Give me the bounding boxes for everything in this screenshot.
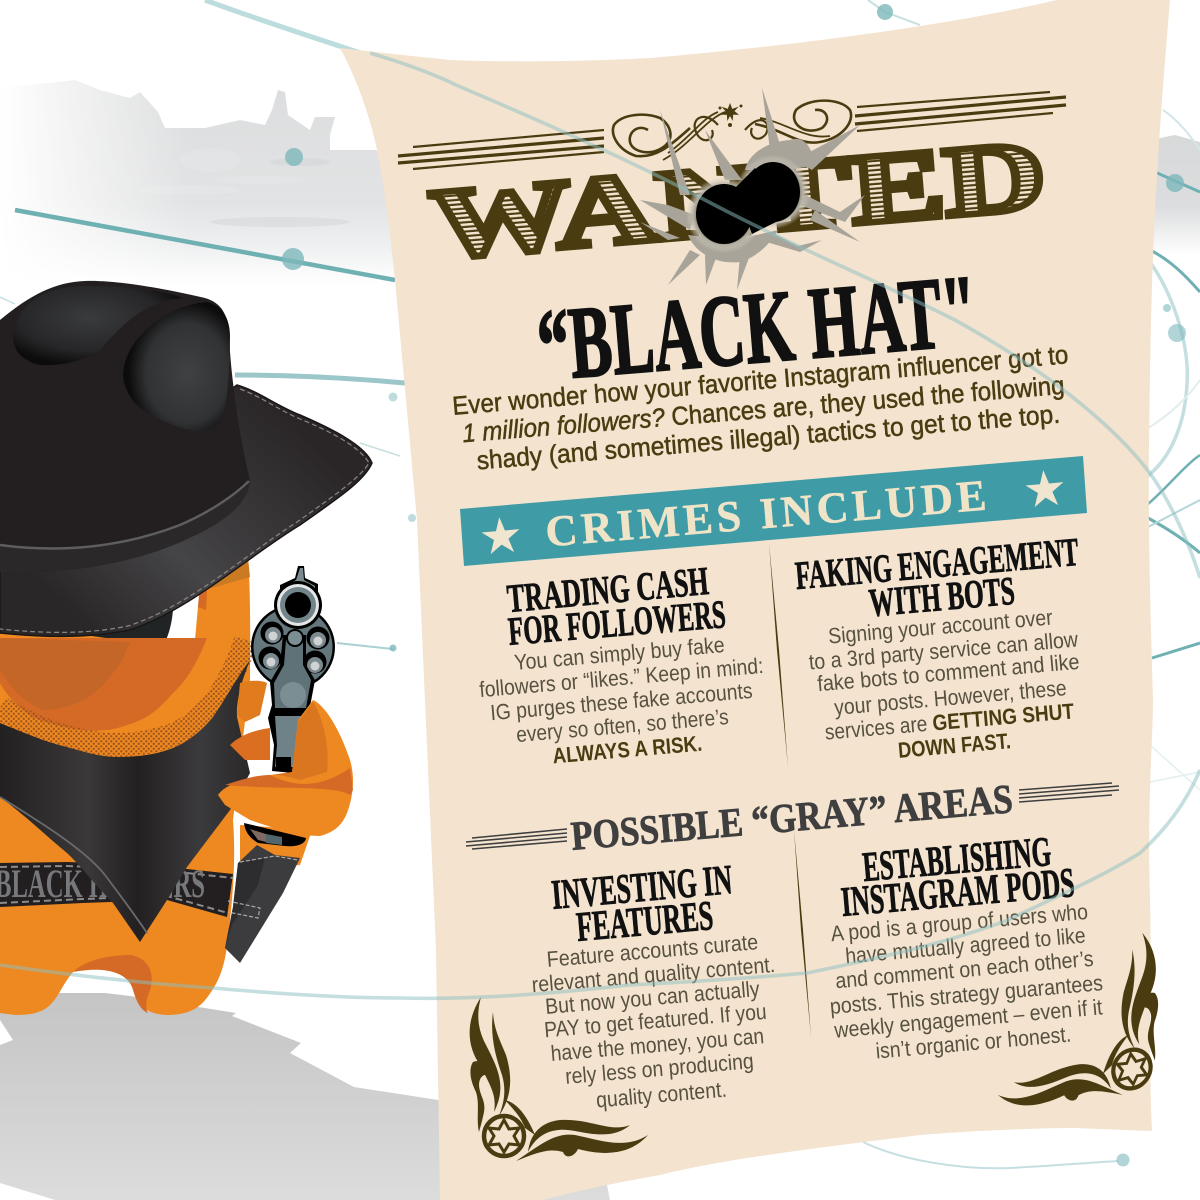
body text: have the money, you can (550, 1023, 765, 1066)
body text: DOWN FAST. (897, 728, 1012, 763)
divider (794, 830, 811, 1037)
lower hip behind hand (240, 825, 312, 870)
body text: rely less on producing (564, 1048, 755, 1089)
halftone band (0, 640, 246, 745)
holster (225, 845, 300, 963)
heading (793, 529, 1080, 625)
ground shadow (0, 993, 610, 1200)
hat dent left (13, 286, 183, 365)
body text: PAY to get featured. If you (543, 999, 768, 1042)
body text: isn’t organic or honest. (875, 1022, 1072, 1064)
icon: left star (480, 515, 521, 555)
hat shadow on face (190, 558, 250, 590)
banner text: CRIMES INCLUDE (544, 471, 988, 556)
divider (769, 543, 788, 767)
banner: crimes include (460, 456, 1087, 566)
body text: your posts. However, these (833, 675, 1068, 720)
section heading: possible gray areas: POSSIBLE “GRAY” AREAS (569, 775, 1014, 859)
gray area: establishing instagram pods (829, 829, 1104, 1064)
wanted title: WANTED (427, 119, 1050, 280)
icon: bullet holes (640, 88, 865, 290)
body text (829, 899, 1104, 1064)
body text: IG purges these fake accounts (489, 678, 753, 725)
body text: quality content. (595, 1077, 728, 1112)
body text: followers or “likes.” Keep in mind: (478, 653, 764, 702)
body text: every so often, so there’s (515, 704, 730, 747)
foreground teal lines over poster (0, 53, 1200, 998)
body text: to a 3rd party service can allow (808, 627, 1079, 675)
hat dent right (123, 302, 230, 431)
belt text: BLACK HATTERS (0, 861, 205, 906)
icon: sunburst ornament (718, 103, 742, 127)
body text: services are GETTING SHUT (824, 698, 1075, 745)
heading: TRADING CASH (505, 558, 710, 621)
body text: You can simply buy fake (513, 632, 726, 675)
body text: posts. This strategy guarantees (829, 970, 1104, 1019)
hat brim (0, 385, 372, 636)
gun grip (244, 823, 306, 846)
body text (478, 632, 764, 768)
body text: fake bots to comment and like (816, 649, 1080, 696)
heading (839, 829, 1076, 926)
body text: But now you can actually (544, 976, 761, 1019)
intro paragraph (451, 339, 1069, 475)
body text (531, 929, 776, 1112)
icon: corner ornament bottom right (987, 931, 1166, 1120)
wanted poster paper (340, 0, 1170, 1200)
body text: A pod is a group of users who (830, 899, 1089, 946)
body text: ALWAYS A RISK. (552, 731, 703, 768)
body text: have mutually agreed to like (844, 923, 1086, 968)
icon: corner ornament bottom left (470, 997, 648, 1161)
heading: FEATURES (575, 893, 715, 951)
body text: relevant and quality content. (531, 952, 776, 997)
heading: WITH BOTS (867, 568, 1017, 625)
belt (0, 861, 233, 917)
body (0, 556, 250, 1015)
body text: and comment on each other’s (834, 946, 1094, 993)
gray area: investing in features (531, 857, 776, 1112)
cheek shading (0, 638, 207, 731)
background node dots (282, 4, 1186, 1166)
crime: trading cash for followers (478, 558, 764, 768)
icon: revolver (251, 566, 335, 773)
crime: faking engagement with bots (793, 529, 1080, 763)
intro paragraph: 1 million followers? Chances are, they used the following (461, 370, 1066, 448)
heading (505, 558, 727, 654)
body text: Signing your account over (827, 604, 1054, 649)
foot shading (73, 955, 152, 1013)
bandana (0, 660, 250, 942)
hat band (0, 482, 250, 573)
intro paragraph: Ever wonder how your favorite Instagram influencer got to (451, 339, 1069, 421)
heading (550, 857, 734, 951)
character: orange black hat mascot (0, 281, 372, 1015)
background: desert landscape (0, 70, 1200, 290)
wanted rules and scroll ornament (398, 92, 1066, 169)
intro paragraph: shady (and sometimes illegal) tactics to get to the top. (476, 399, 1061, 475)
heading: FOR FOLLOWERS (506, 591, 727, 654)
hat (0, 281, 372, 636)
body text: Feature accounts curate (546, 929, 759, 972)
heading: ESTABLISHING (861, 829, 1053, 891)
heading: INVESTING IN (550, 857, 734, 919)
body text: weekly engagement – even if it (832, 994, 1103, 1043)
hand (218, 681, 353, 836)
body text (808, 604, 1080, 763)
icon: right star (1024, 468, 1065, 508)
hat crown (0, 281, 250, 573)
eye (50, 592, 199, 643)
